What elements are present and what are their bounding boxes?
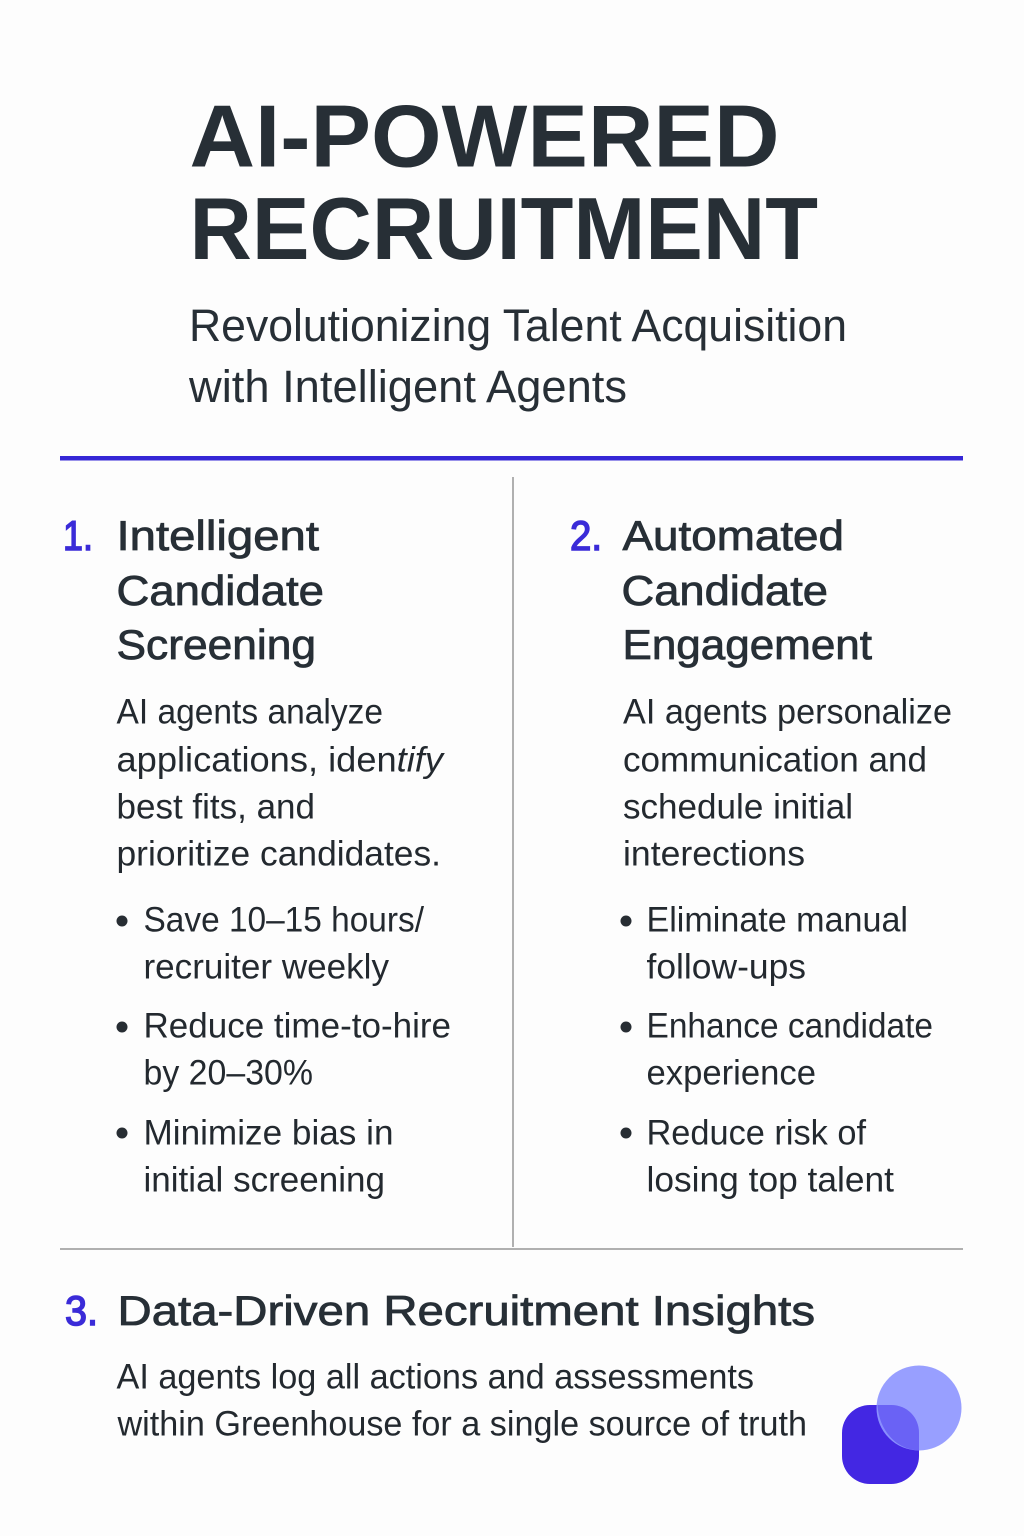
number 3: 3.	[65, 1287, 98, 1334]
heading: automated candidate engagement	[622, 512, 872, 668]
subtitle: Revolutionizing Talent Acquisition	[189, 300, 847, 351]
heading: data-driven recruitment insights: Data-Driven Recruitment Insights	[118, 1287, 815, 1334]
description: AI agents personalize	[623, 692, 952, 732]
description	[623, 692, 952, 874]
heading: automated candidate engagement: Engagement	[622, 621, 872, 668]
description: AI agents log all actions and assessments	[116, 1356, 754, 1396]
heading: automated candidate engagement: Automated	[622, 512, 844, 559]
description	[116, 1356, 807, 1444]
heading: intelligent candidate screening	[116, 512, 324, 668]
bullet list: initial screening	[144, 1160, 385, 1200]
number 2: 2.	[570, 512, 602, 559]
bullet list: Save 10–15 hours/	[144, 900, 424, 940]
bullet list: Reduce risk of	[646, 1112, 866, 1152]
bullet list: Enhance candidate	[646, 1006, 933, 1046]
bullet list: by 20–30%	[144, 1052, 313, 1092]
panel: data-driven recruitment insights	[65, 1287, 815, 1444]
subtitle: with Intelligent Agents	[188, 361, 627, 412]
description: best fits, and	[116, 786, 315, 826]
bullet list: follow-ups	[646, 946, 806, 986]
description: prioritize candidates.	[116, 834, 441, 874]
heading: intelligent candidate screening: Screening	[116, 621, 316, 668]
panel: automated candidate engagement	[570, 512, 952, 1200]
title: AI-POWERED	[190, 86, 780, 186]
bullet list	[116, 900, 451, 1200]
description: applications, identify	[116, 740, 445, 780]
bullet list: recruiter weekly	[144, 946, 389, 986]
icon: overlapping shapes	[842, 1366, 962, 1484]
description: within Greenhouse for a single source of truth	[117, 1404, 807, 1444]
bullet list: Eliminate manual	[646, 900, 908, 940]
description: communication and	[623, 740, 927, 780]
bullet list: losing top talent	[646, 1160, 894, 1200]
description: AI agents analyze	[116, 692, 383, 732]
heading: intelligent candidate screening: Intelligent	[116, 512, 319, 559]
number 1: 1.	[63, 512, 93, 559]
title	[190, 86, 818, 278]
title: RECRUITMENT	[190, 179, 818, 278]
bullet list: Reduce time-to-hire	[144, 1006, 451, 1046]
heading: automated candidate engagement: Candidate	[622, 567, 828, 614]
heading: intelligent candidate screening: Candidate	[116, 567, 324, 614]
bullet list: Minimize bias in	[144, 1112, 394, 1152]
subtitle	[188, 300, 847, 412]
description: interections	[623, 834, 805, 874]
description	[116, 692, 445, 874]
bullet list: experience	[646, 1052, 816, 1092]
bullet list	[620, 900, 933, 1200]
description: schedule initial	[623, 786, 853, 826]
panel: intelligent candidate screening	[63, 512, 451, 1200]
